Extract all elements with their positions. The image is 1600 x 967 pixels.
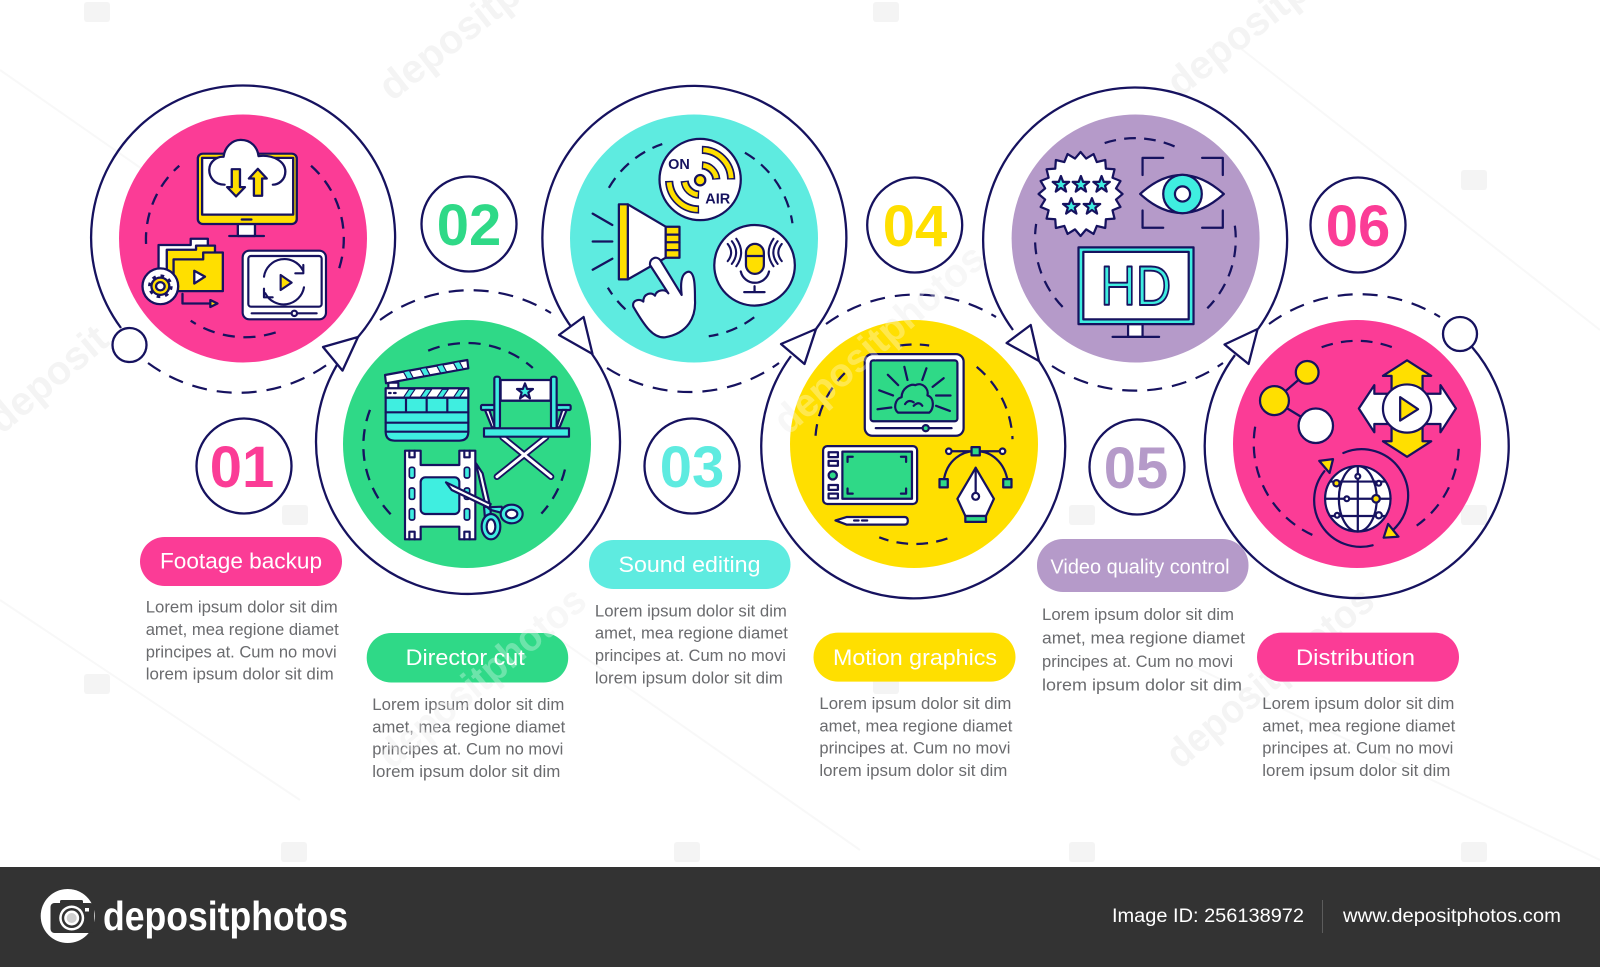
text block: step 1 — [146, 598, 339, 684]
icon: on air badge: ON — [668, 157, 690, 173]
text block: step 5 — [1042, 605, 1245, 694]
icon: clapperboard — [385, 360, 468, 441]
icons: motion graphics — [816, 344, 1013, 544]
icon: eye in frame — [1140, 158, 1224, 228]
number badge 01 — [196, 418, 292, 514]
number badge 01: 01 — [210, 435, 274, 500]
icon: share nodes — [1260, 361, 1333, 443]
text block: step 3: Lorem ipsum dolor sit dim — [595, 601, 787, 620]
text block: step 4 — [819, 694, 1013, 780]
icon: on air badge — [660, 139, 741, 220]
text block: step 3: lorem ipsum dolor sit dim — [595, 668, 783, 687]
number badge 03 — [644, 418, 740, 514]
text block: step 3: amet, mea regione diamet — [595, 624, 788, 643]
text block: step 2: principes at. Cum no movi — [372, 740, 563, 759]
heading pill: Video quality control: Video quality control — [1050, 556, 1230, 578]
flow line: step 5 ring — [983, 88, 1287, 391]
text: depositphotos — [370, 578, 595, 777]
number badge 04: 04 — [883, 194, 947, 259]
number badge 06 — [1310, 178, 1406, 272]
text: depositphotos — [765, 236, 994, 443]
start node — [112, 328, 146, 362]
icon: five star badge — [1039, 152, 1123, 236]
icon: on air badge: AIR — [705, 192, 731, 208]
panel: step 2 green disc — [343, 320, 591, 568]
flow line: step 6 ring — [1205, 294, 1509, 598]
heading pill: Footage backup: Footage backup — [160, 548, 322, 573]
text block: step 2: amet, mea regione diamet — [372, 717, 566, 736]
panel: step 1 pink disc — [119, 114, 367, 362]
icon: folders with gear — [142, 239, 223, 307]
text block: step 4: Lorem ipsum dolor sit dim — [819, 694, 1011, 713]
text block: step 1: amet, mea regione diamet — [146, 620, 339, 639]
text block: step 2: lorem ipsum dolor sit dim — [372, 762, 560, 781]
text block: step 4: lorem ipsum dolor sit dim — [819, 761, 1007, 780]
panel: step 5 purple disc — [1012, 114, 1260, 362]
text block: step 3: principes at. Cum no movi — [595, 646, 786, 665]
icons: sound editing — [593, 139, 795, 337]
arrow: step 5 to 6 — [1224, 329, 1258, 364]
number badge 06: 06 — [1326, 194, 1390, 259]
icon: megaphone — [593, 204, 679, 279]
heading pill: Footage backup — [140, 537, 342, 586]
flow line: step 2 ring — [316, 290, 620, 594]
icon: film strip and scissors — [405, 451, 523, 539]
icon: director chair — [481, 377, 571, 477]
heading pill: Sound editing — [589, 540, 790, 589]
icon: HD monitor: HD — [1101, 254, 1171, 317]
icon: pointing hand — [633, 258, 695, 337]
flow line: step 4 ring — [761, 295, 1065, 598]
heading pill: Director cut: Director cut — [406, 645, 525, 670]
heading pill: Distribution — [1257, 633, 1459, 682]
heading pill: Motion graphics — [814, 633, 1016, 682]
text: depositphotos — [765, 236, 994, 443]
number badge 02: 02 — [437, 193, 501, 258]
icon: stylus — [835, 517, 908, 525]
icon: graphic tablet — [823, 446, 917, 504]
arrow: step 1 to 2 — [323, 337, 358, 371]
icon: replay tablet — [243, 251, 326, 319]
heading pill: Sound editing: Sound editing — [618, 552, 760, 577]
text block: step 6: Lorem ipsum dolor sit dim — [1262, 694, 1454, 713]
icon: HD monitor — [1078, 247, 1194, 337]
arrow: step 4 to 5 — [1007, 325, 1039, 361]
image id: Image ID: 256138972 — [1112, 906, 1304, 927]
end node — [1443, 317, 1477, 351]
text block: step 2: Lorem ipsum dolor sit dim — [372, 695, 564, 714]
logo wordmark: depositphotos — [103, 893, 348, 939]
text block: step 1: lorem ipsum dolor sit dim — [146, 665, 334, 684]
text block: step 4: principes at. Cum no movi — [819, 739, 1010, 758]
text block: step 6: lorem ipsum dolor sit dim — [1262, 761, 1450, 780]
site url: www.depositphotos.com — [1342, 906, 1561, 927]
icons: footage backup — [142, 140, 344, 337]
heading pill: Distribution: Distribution — [1296, 645, 1415, 670]
text block: step 6 — [1262, 694, 1456, 780]
footer bar — [0, 867, 1600, 967]
text block: step 5: amet, mea regione diamet — [1042, 628, 1245, 648]
text block: step 3 — [595, 601, 788, 687]
logo: camera mark — [41, 889, 95, 943]
number badge 04 — [867, 178, 962, 272]
icon: microphone badge — [714, 225, 795, 306]
panel: step 3 cyan disc — [570, 114, 818, 362]
icon: vector pen tool — [940, 447, 1011, 522]
icon: monitor with cloud — [198, 140, 297, 236]
number badge 03: 03 — [660, 435, 724, 500]
text block: step 5: principes at. Cum no movi — [1042, 652, 1233, 671]
heading pill: Video quality control — [1037, 539, 1248, 592]
flow line: step 1 ring — [91, 85, 395, 393]
heading pill: Motion graphics: Motion graphics — [833, 645, 997, 670]
text: depositphotos — [370, 578, 595, 777]
text block: step 6: amet, mea regione diamet — [1262, 716, 1456, 735]
arrow: step 3 to 4 — [781, 329, 816, 364]
text block: step 5: Lorem ipsum dolor sit dim — [1042, 605, 1234, 624]
icon: play with four arrows — [1359, 360, 1456, 457]
number badge 02 — [422, 176, 516, 272]
icons: video quality control — [1035, 138, 1236, 337]
text block: step 1: Lorem ipsum dolor sit dim — [146, 598, 338, 617]
number badge 05 — [1090, 420, 1184, 514]
text block: step 2 — [372, 695, 566, 781]
icons: distribution — [1254, 341, 1459, 547]
number badge 05: 05 — [1104, 436, 1168, 501]
icon: tablet with explosion — [865, 354, 964, 436]
text block: step 4: amet, mea regione diamet — [819, 716, 1013, 735]
icon: globe with circular arrows — [1314, 449, 1408, 547]
panel: step 6 pink disc — [1233, 320, 1481, 568]
text: depositphotos — [1158, 578, 1383, 777]
text block: step 1: principes at. Cum no movi — [146, 642, 337, 661]
text block: step 5: lorem ipsum dolor sit dim — [1042, 676, 1242, 694]
icons: director cut — [363, 343, 571, 539]
flow line: step 3 ring — [542, 86, 846, 392]
heading pill: Director cut — [367, 633, 568, 682]
panel: step 4 yellow disc — [790, 320, 1038, 568]
arrow: step 2 to 3 — [559, 317, 592, 354]
text block: step 6: principes at. Cum no movi — [1262, 739, 1453, 758]
